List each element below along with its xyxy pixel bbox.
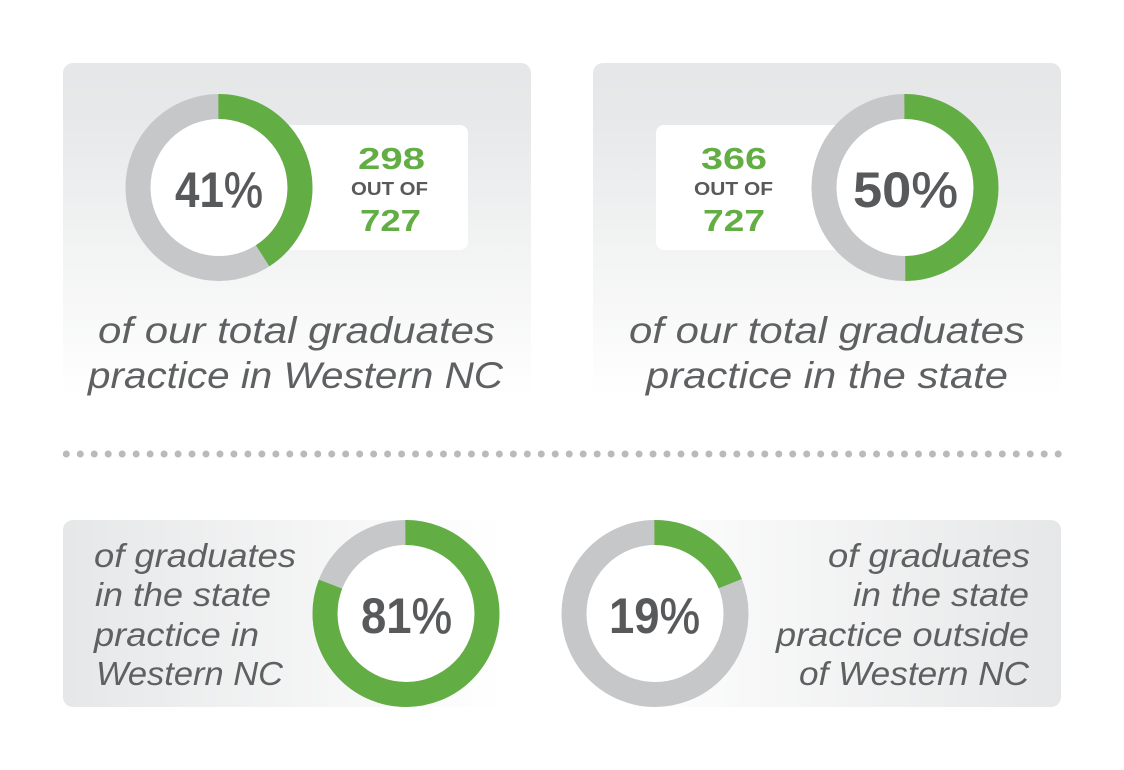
caption: of our total graduates practice in Western NC: of our total graduates [98, 309, 495, 351]
count box: 298 out of 727: 727 [360, 203, 421, 238]
caption: of our total graduates practice in the state: of our total graduates [629, 309, 1025, 351]
caption: of graduates in the state practice outside of Western NC [775, 538, 1030, 693]
donut chart: 81% [325, 532, 487, 694]
caption: of graduates in the state practice in Western NC [93, 538, 296, 693]
caption: of graduates in the state practice in Western NC: Western NC [96, 656, 284, 693]
panel: state graduates practicing in Western NC [63, 520, 503, 707]
count box: 298 out of 727: OUT OF [351, 179, 428, 199]
count box: 366 out of 727: 727 [703, 203, 765, 238]
count box: 298 out of 727 [270, 125, 468, 250]
caption: of graduates in the state practice in Western NC: practice in [93, 617, 259, 654]
donut chart: 19% [574, 532, 736, 694]
count box: 366 out of 727: 366 [701, 141, 767, 176]
caption: of our total graduates practice in the state [629, 309, 1025, 396]
caption: of graduates in the state practice outside of Western NC: in the state [853, 577, 1029, 614]
donut chart: 50% [824, 106, 986, 268]
panel: statewide share of total graduates [593, 63, 1061, 398]
panel: Western NC share of total graduates [63, 63, 531, 398]
caption: of graduates in the state practice outside of Western NC: practice outside [775, 617, 1029, 654]
caption: of graduates in the state practice outside of Western NC: of Western NC [799, 656, 1030, 693]
panel: state graduates practicing outside Western NC [574, 520, 1061, 707]
donut chart: 19%: 19% [609, 588, 700, 644]
caption: of our total graduates practice in the state: practice in the state [645, 354, 1008, 396]
count box: 366 out of 727: OUT OF [694, 179, 773, 199]
caption: of our total graduates practice in Western NC: practice in Western NC [87, 354, 504, 396]
caption: of graduates in the state practice outside of Western NC: of graduates [828, 538, 1030, 575]
caption: of graduates in the state practice in Western NC: in the state [95, 577, 271, 614]
caption: of graduates in the state practice in Western NC: of graduates [94, 538, 296, 575]
donut chart: 41% [138, 106, 300, 268]
donut chart: 41%: 41% [175, 162, 263, 218]
donut chart: 81%: 81% [361, 588, 452, 644]
count box: 366 out of 727 [656, 125, 854, 250]
caption: of our total graduates practice in Western NC [87, 309, 504, 396]
donut chart: 50%: 50% [853, 162, 958, 218]
count box: 298 out of 727: 298 [358, 141, 425, 176]
